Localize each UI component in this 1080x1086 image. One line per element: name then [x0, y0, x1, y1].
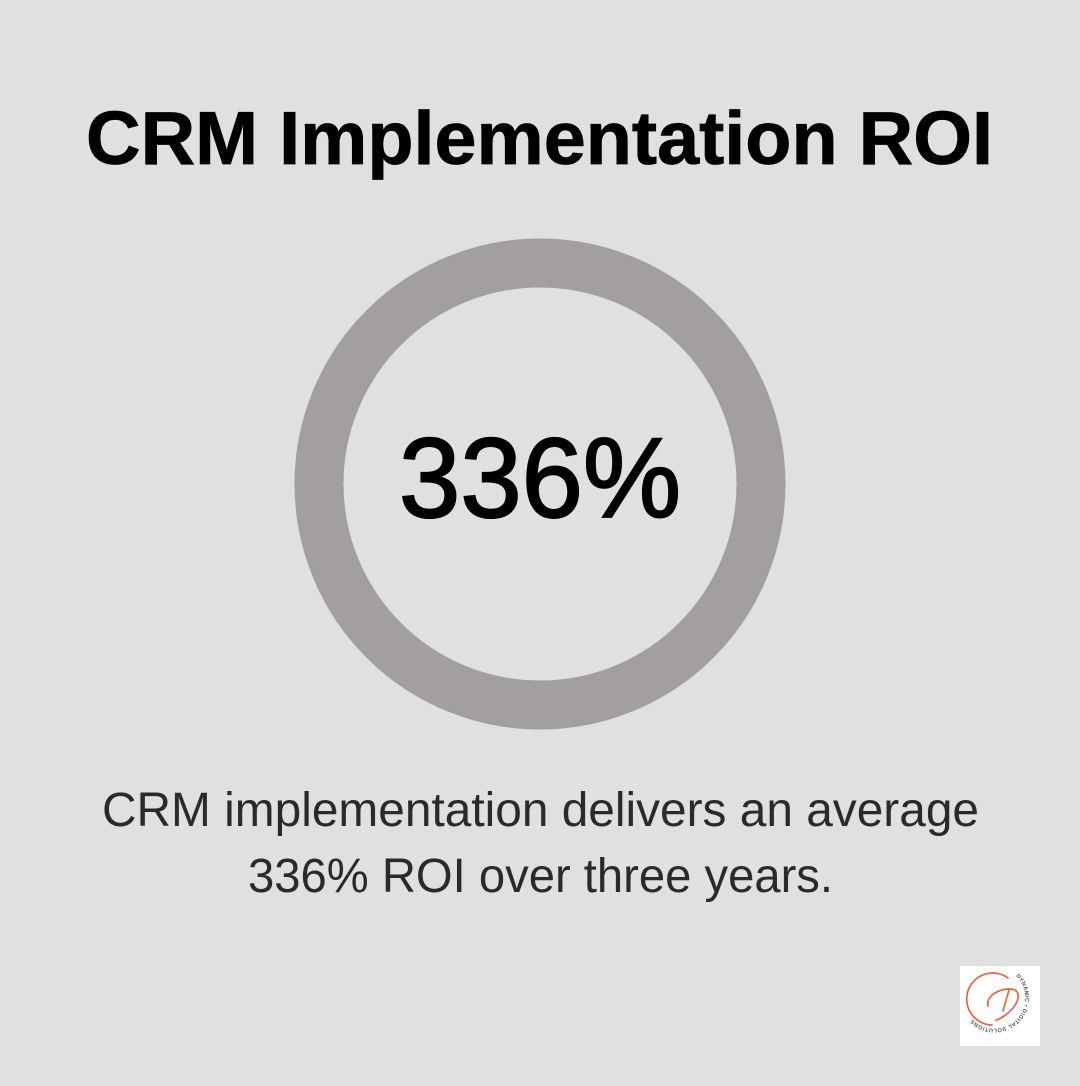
description text: [102, 784, 979, 903]
donut ring: [319, 263, 761, 705]
logo badge: [960, 966, 1040, 1046]
title: CRM Implementation ROI: [86, 96, 993, 180]
description text: 336% ROI over three years.: [248, 850, 833, 903]
description text: CRM implementation delivers an average: [102, 784, 979, 837]
logo: orange circle and D script: [967, 973, 1018, 1025]
logo: circular wordmark: DYNAMIC • DIGITAL SOLUTIONS: [970, 974, 1030, 1033]
central statistic: 336%: [399, 415, 681, 541]
